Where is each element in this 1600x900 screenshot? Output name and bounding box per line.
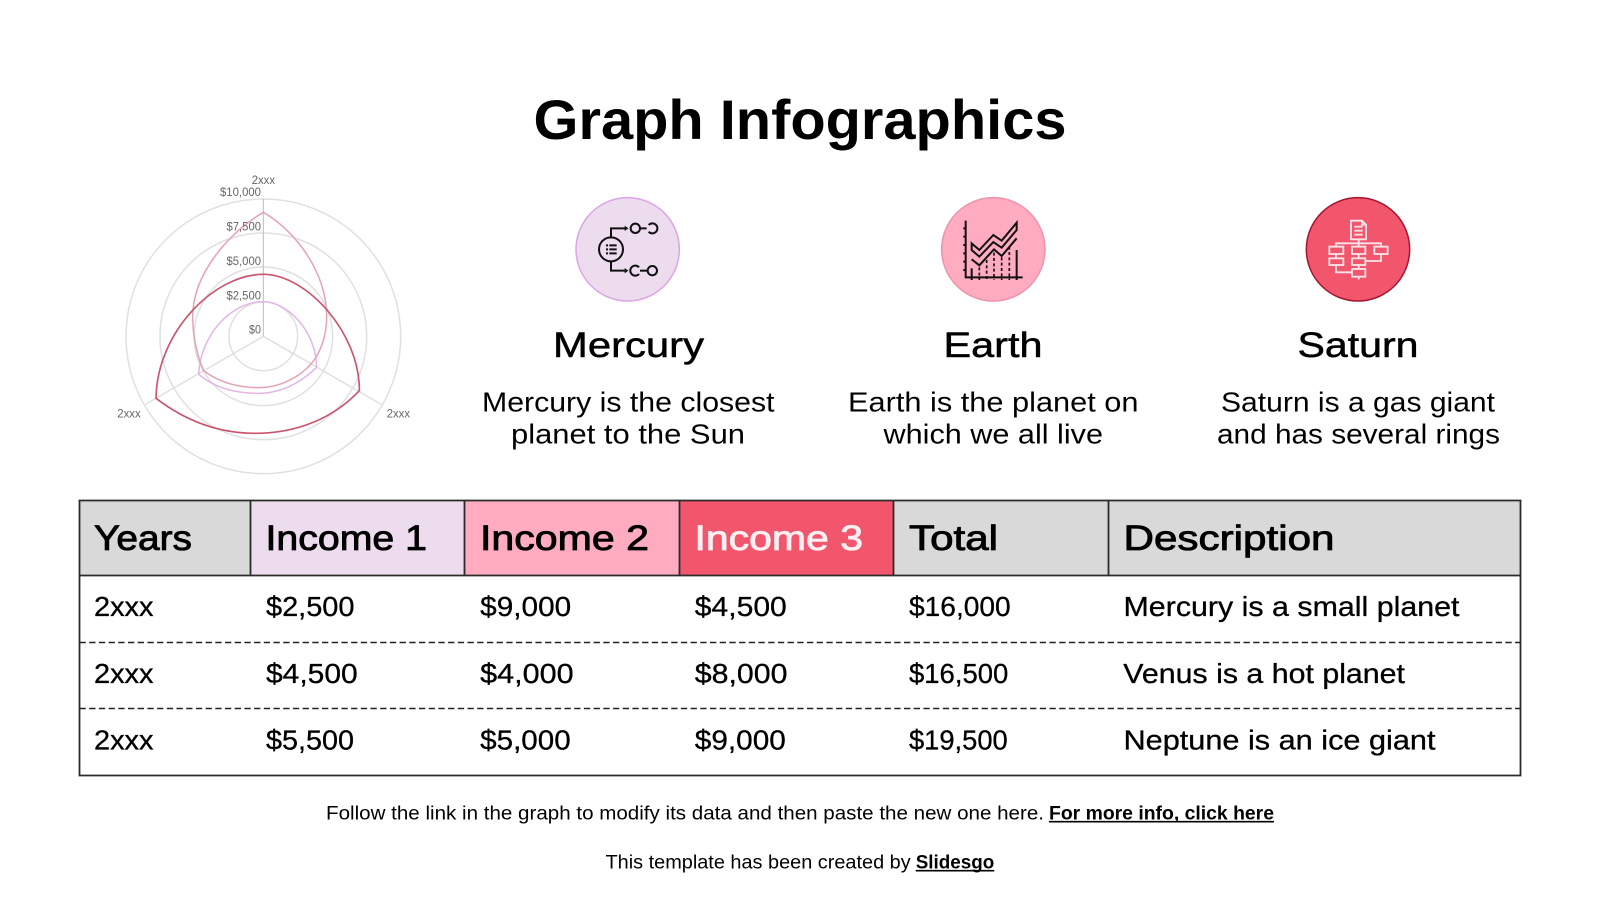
data table xyxy=(80,500,1520,776)
header cell: Total xyxy=(894,500,1108,576)
table row 1: 2xxx xyxy=(94,591,154,622)
chart axis labels: $0 xyxy=(249,322,261,336)
table row 2: $4,500 xyxy=(266,658,358,689)
text: Earth description: Earth is the planet on xyxy=(848,386,1138,418)
series: income 2 xyxy=(193,212,327,388)
table header row xyxy=(80,500,1520,576)
table row 3: $5,000 xyxy=(480,724,571,755)
table row 3 xyxy=(94,724,1436,755)
credit line: Slidesgo xyxy=(916,853,994,874)
header cell: Income 2: Income 2 xyxy=(480,519,649,558)
chart axis labels: 2xxx xyxy=(252,173,275,187)
footer note: For more info, click here xyxy=(1049,803,1274,824)
series: income 1 xyxy=(199,302,317,393)
header cell: Description xyxy=(1108,500,1520,576)
title: Graph Infographics xyxy=(534,88,1066,151)
text: Earth description: which we all live xyxy=(882,418,1103,450)
table row 1: $16,000 xyxy=(909,591,1011,622)
footer note xyxy=(326,803,1274,824)
heading: Saturn: Saturn xyxy=(1298,326,1418,365)
icon: flowchart document xyxy=(1306,198,1410,301)
table row 2: $4,000 xyxy=(480,658,574,689)
text: Earth description xyxy=(848,386,1138,450)
footer note: Follow the link in the graph to modify its data and then paste the new one here. xyxy=(326,803,1044,824)
table row 3: 2xxx xyxy=(94,724,154,755)
icon: process flow xyxy=(576,198,679,301)
header cell: Description: Description xyxy=(1124,519,1334,558)
header cell: Years xyxy=(80,500,250,576)
panel: Saturn xyxy=(1217,198,1500,450)
chart axis labels: 2xxx xyxy=(117,406,141,420)
panel: Earth xyxy=(848,198,1138,450)
table row 3: Neptune is an ice giant xyxy=(1124,724,1436,755)
text: Saturn description: and has several rings xyxy=(1217,418,1500,450)
table row 1: $4,500 xyxy=(695,591,787,622)
header cell: Years: Years xyxy=(94,519,192,558)
header cell: Income 1: Income 1 xyxy=(266,519,427,558)
chart axis labels: 2xxx xyxy=(387,406,410,420)
table row 1 xyxy=(94,591,1460,622)
chart axis labels: $2,500 xyxy=(226,288,261,302)
chart axis labels: $7,500 xyxy=(226,220,261,234)
header cell: Income 3 xyxy=(680,500,894,576)
table row 2: $8,000 xyxy=(695,658,788,689)
series: income 3 xyxy=(156,274,359,433)
header cell: Income 2 xyxy=(464,500,680,576)
header cell: Income 1 xyxy=(250,500,464,576)
icon: line chart xyxy=(942,198,1045,301)
credit line: This template has been created by xyxy=(606,853,911,874)
text: Saturn description xyxy=(1217,386,1500,450)
header cell: Income 3: Income 3 xyxy=(694,519,863,558)
chart axis labels: $10,000 xyxy=(220,185,261,199)
text: Saturn description: Saturn is a gas giant xyxy=(1221,386,1495,418)
chart axis labels: $5,000 xyxy=(226,254,261,268)
table row 2: $16,500 xyxy=(909,658,1008,689)
chart axis labels xyxy=(117,173,410,420)
radar chart xyxy=(117,173,410,474)
table row 1: Mercury is a small planet xyxy=(1124,591,1460,622)
table row 2: Venus is a hot planet xyxy=(1123,658,1405,689)
table row 3: $5,500 xyxy=(266,724,354,755)
table row 2 xyxy=(94,658,1405,689)
header cell: Total: Total xyxy=(909,519,998,558)
table row 3: $9,000 xyxy=(695,724,786,755)
heading: Earth: Earth xyxy=(944,326,1042,365)
text: Mercury description: Mercury is the closest xyxy=(482,386,775,418)
text: Mercury description xyxy=(482,386,775,450)
table row 1: $2,500 xyxy=(266,591,354,622)
table row 1: $9,000 xyxy=(480,591,571,622)
table row 3: $19,500 xyxy=(909,724,1008,755)
heading: Mercury: Mercury xyxy=(553,326,705,365)
table row 2: 2xxx xyxy=(94,658,154,689)
text: Mercury description: planet to the Sun xyxy=(511,418,745,450)
panel: Mercury xyxy=(482,198,775,450)
